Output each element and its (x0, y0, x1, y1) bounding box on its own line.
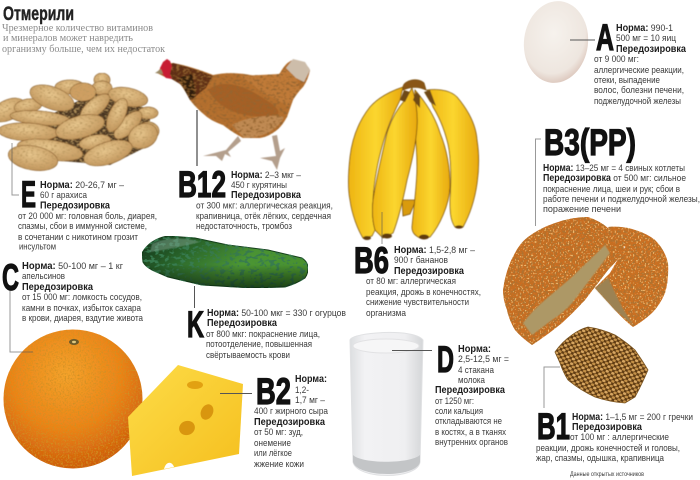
icon: banana bunch (348, 80, 479, 240)
vitamin B12 block: Передозировка (231, 190, 301, 201)
vitamin B2 block (254, 371, 329, 470)
vitamin A block: Передозировка (616, 44, 686, 55)
intro text: и минералов может навредить (3, 33, 133, 44)
vitamin A block: A (596, 17, 614, 58)
icon: cucumber (142, 236, 308, 288)
vitamin C block: в крови, диарея, вздутие живота (22, 313, 144, 324)
vitamin B1 block: жар, спазмы, одышка, крапивница (536, 453, 665, 464)
vitamin A block: поджелудочной железы (594, 96, 681, 107)
vitamin B2 block: онемение (254, 438, 291, 449)
vitamin B2 block: 400 г жирного сыра (254, 406, 329, 417)
vitamin E block: инсультом (19, 242, 56, 252)
vitamin B2 block: Передозировка (254, 417, 325, 428)
vitamin C block: камни в почках, избыток сахара (22, 303, 142, 314)
intro text: Чрезмерное количество витаминов (2, 23, 153, 34)
vitamin B6 block: снижение чувствительности (366, 297, 469, 308)
intro text: организму больше, чем их недостаток (2, 44, 165, 55)
title: Отмерили (3, 4, 74, 25)
icon: milk glass (350, 332, 423, 476)
vitamin E block: Норма: 20-26,7 мг – (40, 180, 125, 191)
vitamin C block: апельсинов (22, 271, 65, 282)
vitamin D block: 2,5-12,5 мг = (458, 354, 509, 365)
vitamin B12 block (178, 164, 333, 232)
vitamin B3 (PP) block: Передозировка от 500 мг: сильное (543, 173, 686, 184)
vitamin B6 block: от 80 мг: аллергическая (366, 276, 456, 287)
vitamin A block: Норма: 990-1 (616, 23, 673, 34)
vitamin K block (187, 304, 346, 361)
vitamin B6 block (354, 240, 481, 319)
icon: buckwheat (555, 327, 648, 403)
vitamin B2 block: или лёгкое (254, 448, 292, 459)
icon: hen (155, 59, 310, 170)
vitamin B1 block (536, 406, 693, 464)
source note: Данные открытых источников (570, 472, 644, 478)
vitamin K block: Норма: 50-100 мкг = 330 г огурцов (207, 308, 346, 319)
vitamin B12 block: 450 г курятины (231, 180, 287, 191)
vitamin C block: C (2, 257, 19, 298)
vitamin A block: отеки, выпадение (594, 75, 660, 86)
vitamin D block (435, 339, 509, 448)
leader lines (10, 40, 595, 408)
vitamin B3 (PP) block: B3(PP) (544, 122, 636, 163)
intro text (2, 23, 165, 55)
vitamin B12 block: крапивница, отёк лёгких, сердечная (196, 211, 331, 222)
vitamin E block: E (21, 174, 36, 215)
vitamin B1 block: B1 (537, 406, 570, 447)
vitamin B2 block: от 50 мг: зуд, (254, 427, 303, 438)
vitamin K block: от 800 мкг: покраснение лица, (206, 329, 320, 340)
vitamin D block: внутренних органов (435, 437, 508, 448)
vitamin K block: свёртываемость крови (206, 350, 290, 361)
icon: peanuts (0, 73, 162, 174)
vitamin C block: от 15 000 мг: ломкость сосудов, (22, 292, 142, 303)
vitamin B6 block: Передозировка (394, 266, 464, 277)
vitamin D block: 4 стакана (458, 365, 495, 376)
vitamin D block: от 1250 мг: (435, 396, 474, 407)
icon: orange (4, 330, 142, 468)
vitamin B12 block: недостаточность, тромбоз (196, 221, 292, 232)
vitamin B3 (PP) block: поражение печени (543, 204, 621, 215)
vitamin D block: Передозировка (435, 385, 505, 396)
vitamin K block: Передозировка (207, 318, 277, 329)
vitamin A block: аллергические реакции, (594, 65, 684, 76)
vitamin E block: от 20 000 мг: головная боль, диарея, (18, 211, 157, 222)
icon: egg (519, 0, 593, 87)
vitamin K block: K (187, 304, 204, 345)
vitamin D block: соли кальция (435, 406, 483, 417)
vitamin B12 block: от 300 мкг: аллергическая реакция, (196, 200, 333, 212)
icon: cheese (128, 365, 243, 476)
vitamin A block: 500 мг = 10 яиц (616, 33, 676, 44)
vitamin E block: в сочетании с никотином грозит (18, 232, 139, 243)
vitamin B2 block: жжение кожи (254, 459, 304, 470)
vitamin B3 (PP) block: Норма: 13–25 мг = 4 свиных котлеты (543, 163, 685, 174)
vitamin B6 block: организма (366, 308, 407, 319)
vitamin E block: Передозировка (40, 200, 110, 212)
vitamin E block: спазмы, сбои в иммунной системе, (18, 221, 147, 232)
vitamin B6 block: реакция, дрожь в конечностях, (366, 287, 481, 298)
vitamin B12 block: B12 (178, 164, 226, 205)
vitamin C block: Норма: 50-100 мг – 1 кг (22, 261, 124, 272)
vitamin D block: в костях, а в тканях (435, 427, 506, 438)
vitamin D block: Норма: (458, 344, 491, 355)
vitamin B1 block: от 100 мг : аллергические (570, 432, 669, 443)
vitamin A block: волос, болезни печени, (594, 85, 684, 96)
vitamin B2 block: B2 (256, 371, 291, 412)
vitamin C block (2, 257, 144, 324)
vitamin K block: потоотделение, повышенная (206, 339, 312, 350)
vitamin B2 block: Норма: (295, 374, 327, 385)
vitamin B12 block: Норма: 2–3 мкг – (231, 170, 302, 181)
vitamin D block: D (437, 339, 454, 380)
vitamin A block (594, 17, 686, 107)
vitamin B2 block: 1,7 мг – (295, 395, 326, 406)
vitamin B6 block: B6 (354, 240, 389, 281)
vitamin B6 block: Норма: 1,5-2,8 мг – (394, 245, 476, 256)
vitamin C block: Передозировка (22, 282, 93, 293)
vitamin B3 (PP) block (543, 122, 700, 215)
vitamin B2 block: 1,2- (295, 385, 309, 396)
vitamin D block: откладываются не (435, 416, 502, 427)
vitamin E block (18, 174, 157, 252)
vitamin D block: молока (458, 375, 486, 386)
vitamin E block: 60 г арахиса (40, 190, 88, 201)
icon: cutlet (503, 217, 668, 345)
vitamin A block: от 9 000 мг: (594, 54, 639, 65)
vitamin B1 block: Передозировка (572, 422, 642, 433)
vitamin B6 block: 900 г бананов (394, 255, 448, 266)
